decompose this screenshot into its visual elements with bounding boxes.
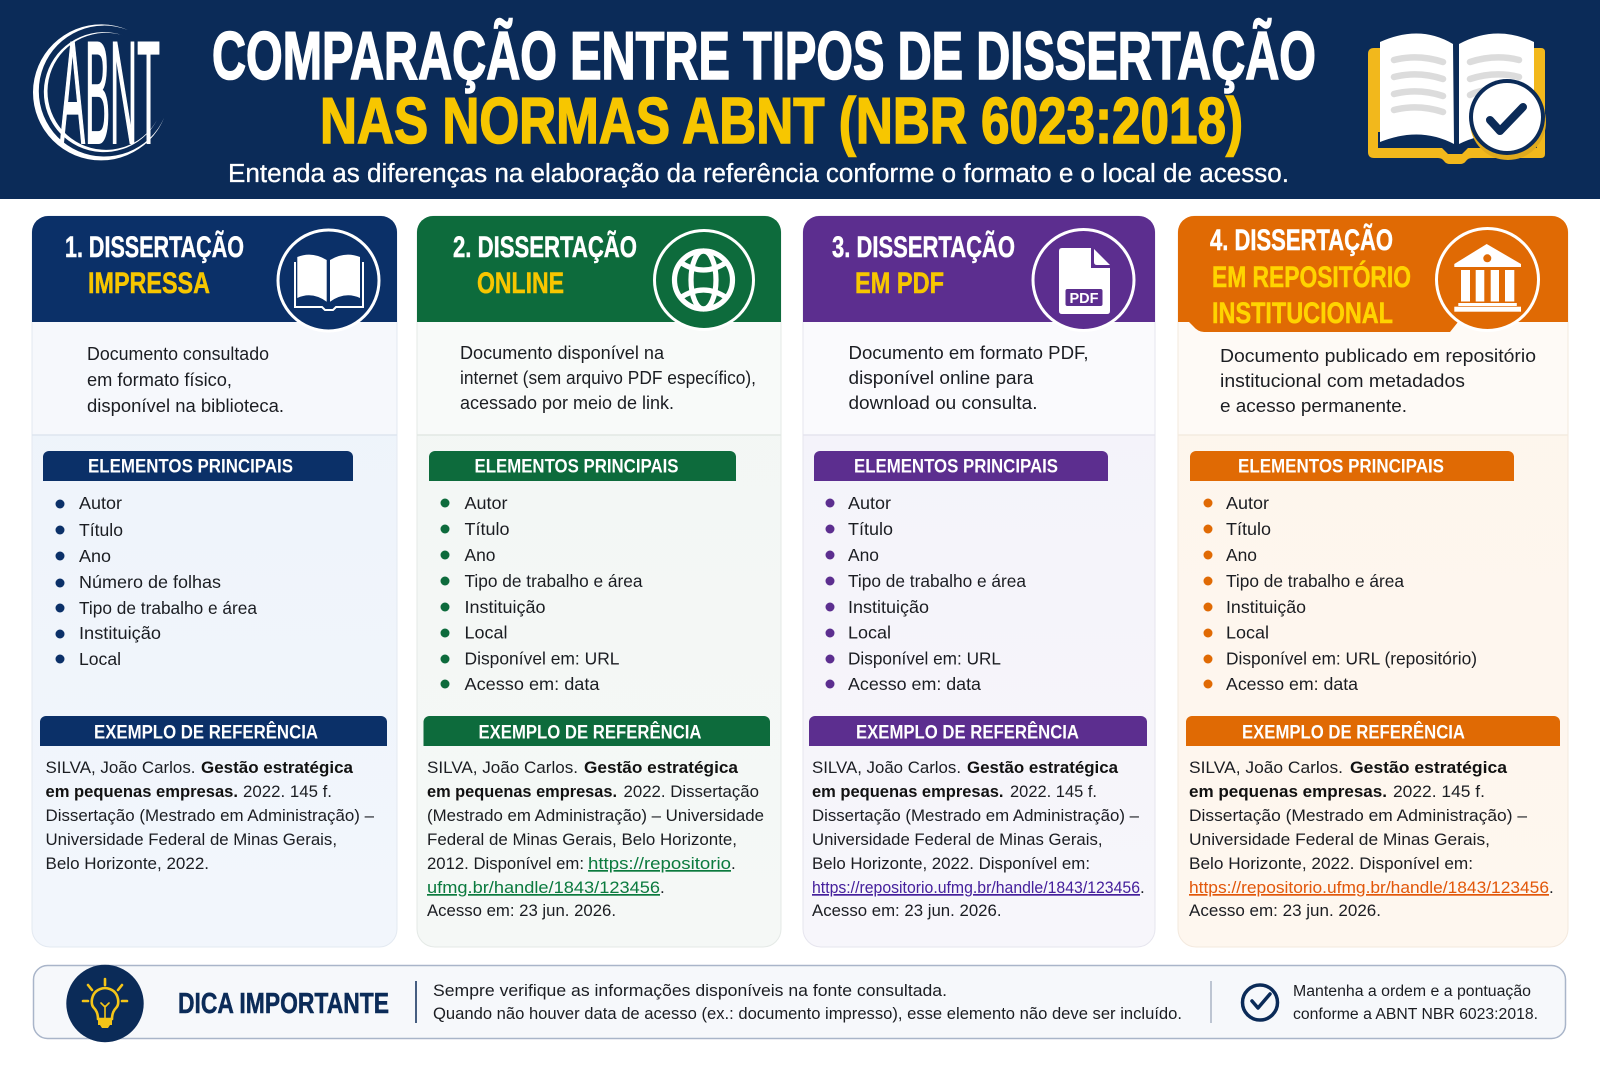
heading: 4. DISSERTAÇÃO: [1210, 223, 1393, 257]
reference example: SILVA, João Carlos.: [812, 758, 961, 777]
reference example: SILVA, João Carlos.: [1189, 758, 1343, 777]
reference example: Gestão estratégica: [201, 758, 354, 777]
reference example: Acesso em: 23 jun. 2026.: [812, 901, 1002, 920]
reference example: [812, 758, 1145, 920]
icon: pdf file: PDF: [1070, 291, 1099, 307]
side note: [1293, 983, 1538, 1023]
heading: dica importante: DICA IMPORTANTE: [178, 988, 389, 1020]
section heading: elementos: [814, 451, 1108, 481]
title: NAS NORMAS ABNT (NBR 6023:2018): [320, 84, 1243, 157]
section heading: elementos: [1190, 451, 1514, 481]
list: elementos: Disponível em: URL: [464, 648, 620, 668]
reference example: [46, 758, 375, 873]
list: elementos: Título: [464, 519, 510, 539]
reference example: .: [1549, 878, 1554, 897]
reference example: 2022. 145 f.: [1393, 782, 1485, 801]
reference example: https://repositorio.ufmg.br/handle/1843/123456: [812, 878, 1140, 897]
section heading: elementos: [43, 451, 353, 481]
panel: dissertação em repositório institucional: [1178, 216, 1568, 947]
list: elementos: Acesso em: data: [464, 674, 600, 694]
list: elementos: [440, 493, 643, 694]
list: elementos: Número de folhas: [79, 572, 221, 592]
description: Documento disponível na: [460, 343, 665, 363]
reference example: Gestão estratégica: [584, 758, 739, 777]
section heading: elementos: ELEMENTOS PRINCIPAIS: [854, 456, 1058, 478]
header banner: [0, 0, 1600, 199]
description: e acesso permanente.: [1220, 396, 1407, 416]
reference example: SILVA, João Carlos.: [46, 758, 196, 777]
description: [460, 343, 756, 413]
description: Documento em formato PDF,: [848, 343, 1088, 363]
header banner: ABNT: [60, 11, 160, 174]
heading: INSTITUCIONAL: [1212, 297, 1393, 330]
icon: pdf file: [1033, 230, 1134, 330]
icon: book: [278, 230, 379, 331]
list: elementos: Instituição: [79, 623, 161, 643]
description: [848, 343, 1088, 413]
list: elementos: Local: [79, 649, 121, 669]
list: elementos: Acesso em: data: [1226, 674, 1358, 694]
description: institucional com metadados: [1220, 371, 1465, 391]
list: elementos: [56, 493, 257, 669]
reference example: [1189, 758, 1554, 920]
icon: check circle: [1242, 985, 1278, 1020]
section heading: exemplo: EXEMPLO DE REFERÊNCIA: [94, 722, 318, 744]
reference example: Belo Horizonte, 2022. Disponível em:: [812, 854, 1090, 873]
list: elementos: Ano: [848, 545, 879, 565]
section heading: elementos: ELEMENTOS PRINCIPAIS: [474, 456, 678, 478]
reference example: 2022. Dissertação: [624, 782, 759, 801]
tip text: Quando não houver data de acesso (ex.: documento impresso), esse elemento não deve ser incluído.: [433, 1005, 1182, 1023]
section heading: exemplo: [809, 716, 1147, 746]
list: elementos: Título: [79, 520, 123, 540]
side note: Mantenha a ordem e a pontuação: [1293, 983, 1531, 1000]
icon: light bulb: [66, 965, 144, 1042]
panel: dissertação online: [417, 216, 781, 947]
list: elementos: Disponível em: URL (repositório): [1226, 648, 1477, 668]
section heading: exemplo: EXEMPLO DE REFERÊNCIA: [1242, 722, 1465, 744]
icon: open book with check: [1368, 33, 1546, 164]
icon: globe: [654, 230, 754, 330]
reference example: em pequenas empresas.: [46, 782, 238, 801]
reference example: .: [731, 854, 736, 873]
heading: EM PDF: [855, 267, 944, 300]
list: elementos: Tipo de trabalho e área: [79, 598, 257, 618]
tip text: Sempre verifique as informações disponíveis na fonte consultada.: [433, 982, 947, 1000]
list: elementos: Autor: [848, 493, 891, 513]
heading: ONLINE: [477, 267, 564, 300]
description: acessado por meio de link.: [460, 393, 674, 413]
list: elementos: Disponível em: URL: [848, 648, 1001, 668]
description: disponível na biblioteca.: [87, 396, 284, 416]
list: elementos: Ano: [464, 545, 496, 565]
reference example: em pequenas empresas.: [1189, 782, 1387, 801]
reference example: Belo Horizonte, 2022. Disponível em:: [1189, 854, 1473, 873]
description: [1220, 346, 1536, 416]
section heading: elementos: ELEMENTOS PRINCIPAIS: [88, 456, 293, 478]
list: elementos: Ano: [79, 546, 111, 566]
section heading: exemplo: EXEMPLO DE REFERÊNCIA: [478, 722, 702, 744]
description: Documento consultado: [87, 344, 269, 364]
list: elementos: Autor: [1226, 493, 1269, 513]
heading: 3. DISSERTAÇÃO: [832, 230, 1015, 264]
tip text: [433, 982, 1182, 1023]
description: [87, 344, 284, 416]
reference example: .: [1140, 878, 1145, 897]
section heading: elementos: ELEMENTOS PRINCIPAIS: [1238, 456, 1444, 478]
list: elementos: Ano: [1226, 545, 1257, 565]
reference example: https://repositorio: [588, 854, 731, 873]
description: internet (sem arquivo PDF específico),: [460, 368, 756, 388]
list: elementos: [1204, 493, 1477, 694]
reference example: Dissertação (Mestrado em Administração) –: [46, 806, 375, 825]
reference example: Federal de Minas Gerais, Belo Horizonte,: [427, 830, 737, 849]
reference example: 2022. 145 f.: [243, 782, 332, 801]
panel: dissertação impressa: [32, 216, 397, 947]
reference example: em pequenas empresas.: [812, 782, 1004, 801]
reference example: Acesso em: 23 jun. 2026.: [427, 901, 616, 920]
reference example: Universidade Federal de Minas Gerais,: [812, 830, 1102, 849]
icon: institution building: [1436, 228, 1538, 330]
list: elementos: Autor: [464, 493, 508, 513]
list: elementos: Autor: [79, 493, 122, 513]
panel: dissertação em PDF: [803, 216, 1155, 947]
section heading: exemplo: EXEMPLO DE REFERÊNCIA: [856, 722, 1079, 744]
heading: [453, 230, 637, 300]
reference example: Dissertação (Mestrado em Administração) –: [812, 806, 1140, 825]
icon: ABNT logo: [33, 11, 164, 174]
list: elementos: Local: [1226, 622, 1269, 642]
reference example: Universidade Federal de Minas Gerais,: [1189, 830, 1490, 849]
list: elementos: Instituição: [848, 597, 929, 617]
side note: conforme a ABNT NBR 6023:2018.: [1293, 1006, 1538, 1023]
heading: 2. DISSERTAÇÃO: [453, 230, 637, 264]
panel: dica importante: [34, 965, 1566, 1042]
heading: EM REPOSITÓRIO: [1212, 260, 1411, 294]
description: Documento publicado em repositório: [1220, 346, 1536, 366]
list: elementos: [826, 493, 1026, 694]
reference example: em pequenas empresas.: [427, 782, 617, 801]
list: elementos: Tipo de trabalho e área: [848, 571, 1026, 591]
heading: [832, 230, 1015, 300]
reference example: Universidade Federal de Minas Gerais,: [46, 830, 337, 849]
section heading: elementos: [429, 451, 736, 481]
heading: IMPRESSA: [88, 267, 210, 300]
reference example: https://repositorio.ufmg.br/handle/1843/123456: [1189, 878, 1549, 897]
list: elementos: Acesso em: data: [848, 674, 981, 694]
description: em formato físico,: [87, 370, 232, 390]
list: elementos: Tipo de trabalho e área: [464, 571, 643, 591]
heading: [1210, 223, 1411, 330]
list: elementos: Instituição: [464, 597, 546, 617]
reference example: Gestão estratégica: [967, 758, 1119, 777]
list: elementos: Instituição: [1226, 597, 1306, 617]
list: elementos: Título: [848, 519, 893, 539]
heading: [65, 230, 244, 300]
reference example: Gestão estratégica: [1350, 758, 1508, 777]
description: download ou consulta.: [848, 393, 1038, 413]
reference example: 2012. Disponível em:: [427, 854, 584, 873]
reference example: Belo Horizonte, 2022.: [46, 854, 209, 873]
reference example: 2022. 145 f.: [1010, 782, 1097, 801]
section heading: exemplo: [1186, 716, 1560, 746]
reference example: Dissertação (Mestrado em Administração) –: [1189, 806, 1528, 825]
heading: 1. DISSERTAÇÃO: [65, 230, 244, 264]
reference example: ufmg.br/handle/1843/123456: [427, 878, 660, 897]
reference example: SILVA, João Carlos.: [427, 758, 578, 777]
list: elementos: Tipo de trabalho e área: [1226, 571, 1404, 591]
list: elementos: Local: [464, 622, 508, 642]
reference example: Acesso em: 23 jun. 2026.: [1189, 901, 1381, 920]
reference example: .: [660, 878, 665, 897]
title: [212, 18, 1316, 157]
section heading: exemplo: [40, 716, 387, 746]
list: elementos: Local: [848, 622, 891, 642]
reference example: (Mestrado em Administração) – Universidade: [427, 806, 764, 825]
reference example: [427, 758, 764, 920]
subtitle: Entenda as diferenças na elaboração da referência conforme o formato e o local de acesso.: [228, 160, 1289, 188]
list: elementos: Título: [1226, 519, 1271, 539]
description: disponível online para: [848, 368, 1035, 388]
section heading: exemplo: [424, 716, 770, 746]
